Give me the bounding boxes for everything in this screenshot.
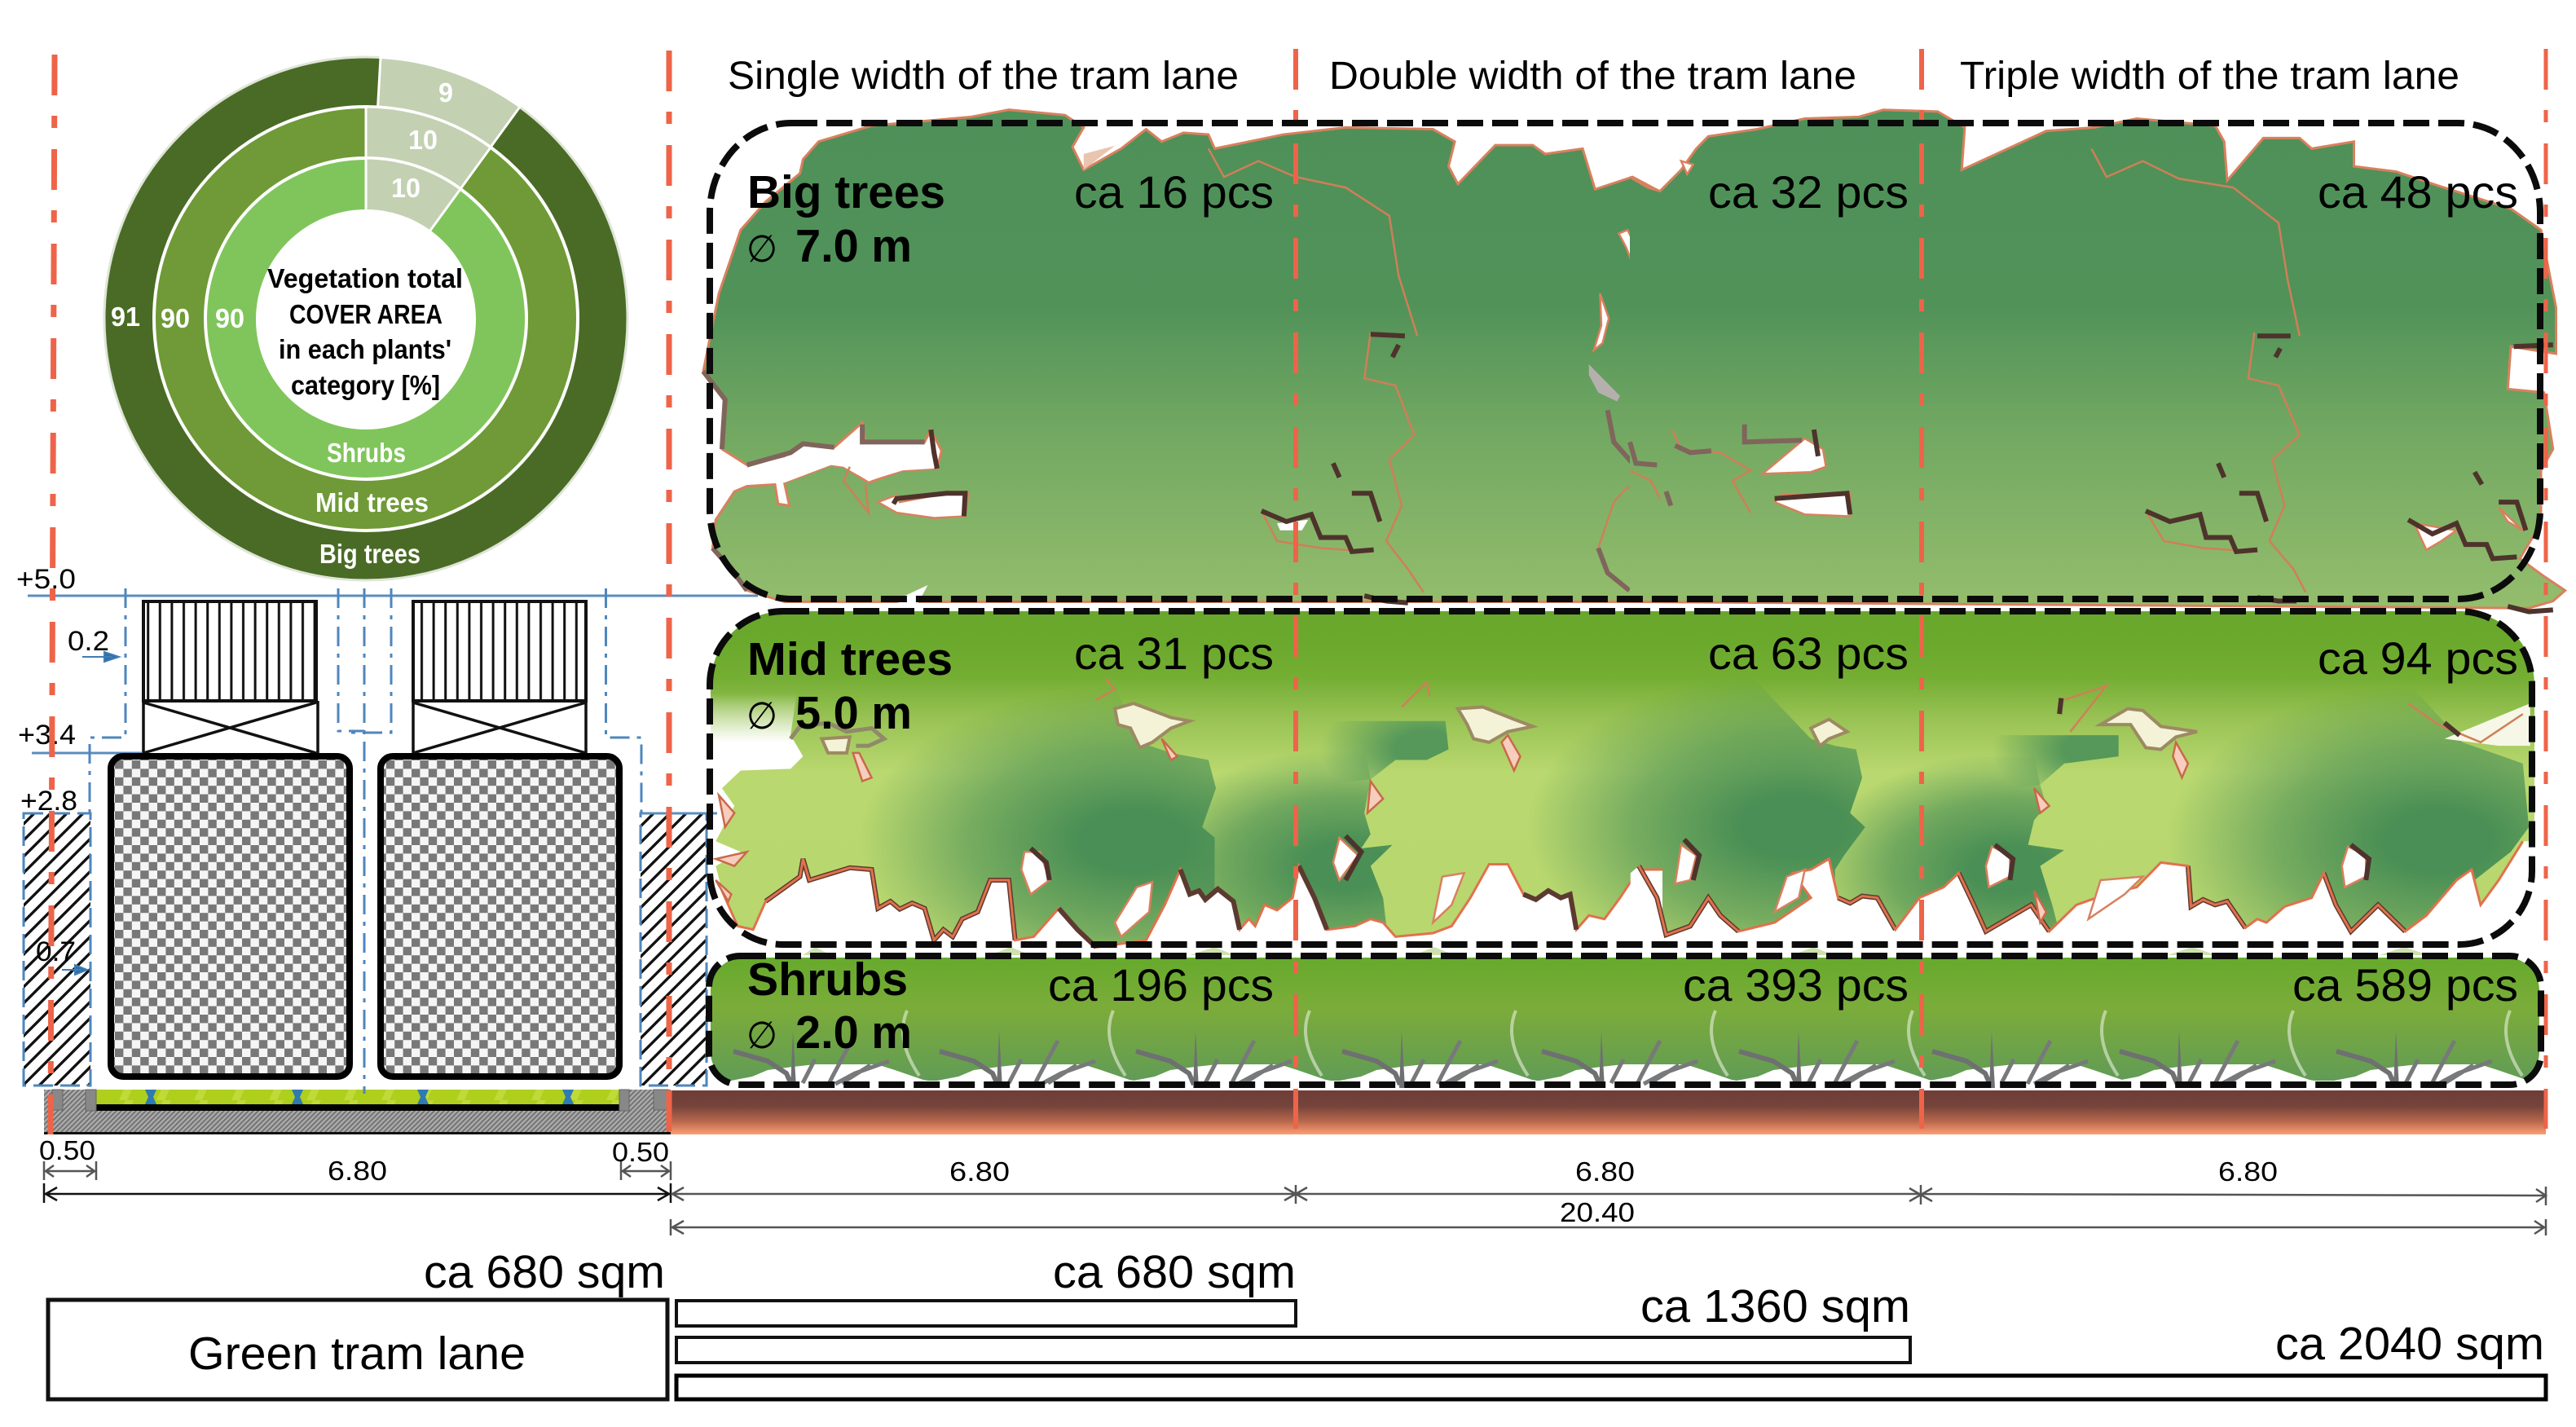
canopy left part (703, 110, 1662, 608)
shrubs labels: ca 393 pcs (1683, 959, 1909, 1011)
column headings (728, 55, 2459, 98)
track curbs (52, 1090, 668, 1111)
red dashed boundary lines (51, 49, 2546, 1134)
dashed box: big trees (710, 123, 2540, 599)
donut value labels: Mid trees (315, 487, 429, 518)
dimension: 0.50 right (621, 1161, 671, 1180)
mid trees shaded foliage, left tile (809, 685, 1448, 951)
dimension labels: 6.80 (328, 1156, 387, 1186)
elevation labels: +3.4 (18, 720, 76, 751)
area bar: triple width (676, 1376, 2546, 1399)
mid trees labels: 5.0 m (795, 687, 912, 739)
shrubs labels: ca 589 pcs (2292, 959, 2518, 1011)
blue rail chairs (145, 1090, 574, 1104)
pale foliage tips between mid trees and shrubs (803, 947, 2428, 955)
dimension labels (39, 1135, 2278, 1227)
elevation lines (28, 596, 758, 813)
panel: tram cross-section (16, 564, 758, 1134)
big trees labels: ca 32 pcs (1708, 166, 1909, 218)
dashed box: shrubs (709, 956, 2541, 1085)
pantograph hatching (143, 601, 316, 701)
donut value labels: 10 (391, 173, 421, 203)
donut hole (256, 209, 476, 429)
big trees labels: 7.0 m (795, 220, 912, 272)
dimension labels: 6.80 (1575, 1156, 1635, 1187)
mid trees white ground and detail, right tile (1631, 685, 2547, 954)
left tram body (111, 756, 350, 1077)
column headings: Triple width of the tram lane (1960, 55, 2459, 98)
panel: mid trees canopy (685, 611, 2547, 955)
arrow: 0.7 clearance (62, 965, 87, 975)
shrubs labels (746, 954, 2518, 1059)
big trees labels: ca 48 pcs (2318, 166, 2518, 218)
mid trees white ground and detail, left tile (685, 679, 1662, 954)
right clearance line (606, 588, 641, 813)
shrubs base gradient (711, 958, 2539, 1085)
right pantograph (413, 601, 588, 753)
road base hatch (44, 1090, 671, 1134)
dimension: 20.40 span (671, 1219, 2546, 1235)
area labels: Green tram lane (188, 1328, 526, 1380)
left hatched block (24, 813, 90, 1086)
clearance dash-dot lines (90, 588, 125, 813)
donut value labels: 10 (408, 125, 438, 155)
dimension labels: 6.80 (2218, 1156, 2278, 1187)
pantograph hatching (413, 601, 586, 701)
big trees labels: ∅ (746, 227, 777, 271)
dimension: three 6.80 spans (672, 1185, 2546, 1205)
soil strip (669, 1090, 2546, 1134)
column headings: Double width of the tram lane (1329, 55, 1856, 98)
shrub tufts row (733, 1011, 2522, 1088)
road base bottom line (44, 1132, 671, 1134)
donut chart: vegetation total cover area (104, 57, 627, 580)
area labels: ca 680 sqm (424, 1246, 665, 1298)
area labels (188, 1246, 2544, 1380)
dimension lines (39, 1135, 2546, 1235)
donut value labels: Big trees (319, 539, 421, 569)
mid trees labels: ca 31 pcs (1074, 628, 1274, 679)
shrubs labels: ca 196 pcs (1048, 959, 1274, 1011)
donut centre caption (267, 263, 463, 400)
big trees labels: Big trees (747, 166, 945, 218)
shrubs labels: 2.0 m (795, 1006, 912, 1059)
inner ring: shrubs (205, 158, 526, 479)
elevation labels: +5.0 (16, 564, 76, 595)
big trees labels: ca 16 pcs (1074, 166, 1274, 218)
dimension labels: 0.50 (39, 1135, 95, 1165)
mid trees base gradient (711, 611, 2534, 945)
donut centre caption: Vegetation total (267, 263, 463, 293)
shrubs labels: ∅ (746, 1013, 777, 1057)
mid trees labels (746, 628, 2518, 739)
pantograph cross (143, 701, 318, 753)
mid trees labels: Mid trees (747, 633, 953, 685)
area bar: double width (676, 1337, 1910, 1363)
area labels: ca 1360 sqm (1640, 1280, 1910, 1332)
dashed box: mid trees (710, 611, 2532, 945)
elevation labels (16, 564, 109, 967)
track centre line (363, 588, 365, 1094)
donut value labels: 90 (215, 303, 244, 333)
area labels: ca 2040 sqm (2275, 1318, 2544, 1370)
dimension: 6.80 cross-section (44, 1183, 671, 1203)
left pantograph (143, 601, 318, 753)
middle ring: mid trees (154, 107, 578, 531)
area comparison (48, 1246, 2546, 1399)
dimension labels: 6.80 (949, 1156, 1010, 1187)
big trees labels (746, 166, 2518, 272)
area labels: ca 680 sqm (1053, 1246, 1296, 1298)
shrubs labels: Shrubs (747, 954, 908, 1006)
shrubs white ground humps (711, 1064, 2541, 1089)
elevation labels: 0.2 (68, 626, 109, 657)
mid trees shaded foliage, right tile (1521, 675, 2529, 951)
donut centre caption: COVER AREA (289, 299, 443, 329)
donut centre caption: category [%] (291, 370, 440, 400)
wedge: mid trees remainder (366, 107, 491, 319)
wedge: big trees remainder (366, 57, 520, 319)
mid trees labels: ∅ (746, 694, 777, 738)
track black slab (96, 1104, 619, 1111)
right hatched block (641, 813, 707, 1086)
centre clearance lines (338, 588, 391, 733)
right tram body (381, 756, 619, 1077)
elevation labels: 0.7 (36, 936, 76, 967)
arrow: 0.2 clearance (82, 652, 119, 662)
dimension: 0.50 left (44, 1161, 96, 1180)
green track strip (96, 1090, 619, 1104)
pantograph cross (413, 701, 588, 753)
dimension labels: 0.50 (612, 1137, 669, 1167)
donut value labels (111, 77, 453, 569)
mid trees labels: ca 63 pcs (1708, 628, 1909, 679)
mid trees labels: ca 94 pcs (2318, 632, 2518, 684)
panel: shrubs (711, 958, 2541, 1089)
dimension labels: 20.40 (1560, 1197, 1635, 1227)
column headings: Single width of the tram lane (728, 55, 1239, 98)
elevation labels: +2.8 (20, 786, 77, 817)
panel: big trees canopy (703, 110, 2565, 612)
donut value labels: 9 (438, 77, 453, 108)
wedge: shrubs remainder (366, 158, 460, 319)
outer ring: big trees (104, 57, 627, 580)
donut value labels: 91 (111, 302, 140, 332)
area bar: single width (676, 1301, 1296, 1326)
area box: green tram lane (48, 1300, 667, 1399)
donut value labels: 90 (161, 303, 190, 333)
donut centre caption: in each plants' (279, 334, 451, 364)
canopy right part (1630, 110, 2565, 612)
donut value labels: Shrubs (327, 438, 406, 468)
